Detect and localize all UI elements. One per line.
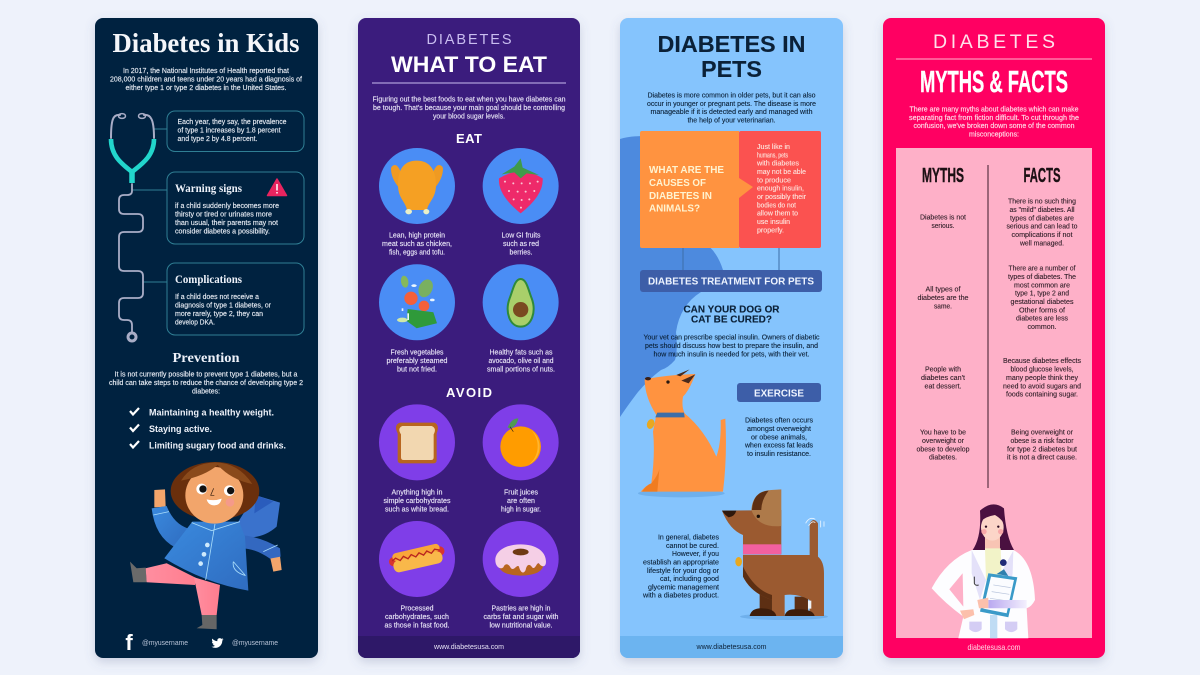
callout: prevalence xyxy=(167,111,304,152)
caption: processed carbohydrates: carbohydrates, such xyxy=(385,614,449,621)
fact 1: types of diabetes are xyxy=(1010,216,1074,222)
callout: warning signs: if a child suddenly becomes more xyxy=(175,203,279,210)
text: exercise: or obese animals, xyxy=(751,434,807,442)
fact 4: for type 2 diabetes but xyxy=(1007,446,1077,454)
heading: EAT: EAT xyxy=(456,131,482,146)
text: cannot be cured: lifestyle for your dog or xyxy=(647,568,720,575)
callout: causes: enough insulin, xyxy=(757,186,804,193)
caption: processed carbohydrates: as those in fast food. xyxy=(384,622,450,630)
caption: low GI fruits: Low GI fruits xyxy=(502,232,541,240)
text: cannot be cured: cannot be cured. xyxy=(666,543,719,550)
panel: myths and facts xyxy=(883,18,1105,658)
fact 3: many people think they xyxy=(1006,375,1078,382)
subheading: can your dog be cured: CAT BE CURED? xyxy=(691,314,772,326)
fact 4: Being overweight or xyxy=(1011,430,1074,436)
caption: pastries: Pastries are high in xyxy=(492,606,551,612)
illustration: doctor xyxy=(932,504,1035,638)
callout: prevalence: and type 2 by 4.8 percent. xyxy=(178,136,258,143)
caption: pastries: carbs fat and sugar with xyxy=(484,614,559,621)
intro text: either type 1 or type 2 diabetes in the United States. xyxy=(126,85,287,92)
fact 2: common. xyxy=(1028,324,1057,331)
caption: healthy fats: avocado, olive oil and xyxy=(488,358,554,365)
callout: complications: If a child does not receive a xyxy=(175,294,259,301)
fact 3: Because diabetes effects xyxy=(1003,358,1081,365)
callout: complications: Complications xyxy=(175,272,242,286)
caption: fresh vegetables: but not fried. xyxy=(397,366,437,374)
social: twitter xyxy=(212,638,278,648)
fact 2: Other forms of xyxy=(1019,308,1065,314)
checklist xyxy=(130,408,286,452)
fact 4 xyxy=(1007,430,1077,462)
myth 4: overweight or xyxy=(922,438,965,445)
title: Diabetes in Pets xyxy=(658,31,806,82)
prevention text: diabetes: xyxy=(192,388,220,396)
caption: pastries: low nutritional value. xyxy=(490,622,553,630)
myth 3: diabetes can't xyxy=(921,375,965,382)
fact 2: type 1, type 2 and xyxy=(1015,290,1069,298)
subheading: can your dog be cured: CAN YOUR DOG OR xyxy=(684,304,780,316)
footer band xyxy=(358,636,580,658)
intro text: manageable if it is detected early and managed with xyxy=(650,109,813,116)
intro text: your blood sugar levels. xyxy=(433,114,505,120)
fact 2: gestational diabetes xyxy=(1010,299,1074,306)
fact 4: obese is a risk factor xyxy=(1010,438,1074,445)
myth 4: diabetes. xyxy=(929,454,957,462)
callout: prevalence: of type 1 increases by 1.8 percent xyxy=(178,128,281,134)
background blob xyxy=(620,136,723,417)
fact 1 xyxy=(1006,198,1078,248)
intro text: the help of your veterinarian. xyxy=(688,118,776,124)
caption: lean protein: meat such as chicken, xyxy=(382,241,452,248)
text: cannot be cured: In general, diabetes xyxy=(658,534,719,542)
illustration: cat xyxy=(638,369,726,497)
intro text: separating fact from fiction difficult. To cut through the xyxy=(909,115,1079,122)
caption: fresh vegetables: preferably steamed xyxy=(386,358,448,365)
caption: low GI fruits: such as red xyxy=(503,241,539,248)
text: cannot be cured: with a diabetes product. xyxy=(642,592,719,600)
intro text: Figuring out the best foods to eat when you have diabetes can xyxy=(372,96,566,104)
text: vet insulin: Your vet can prescribe special insulin. Owners of diabetic xyxy=(644,334,820,342)
food icon: strawberry xyxy=(483,148,559,224)
checklist: Limiting sugary food and drinks. xyxy=(149,440,286,452)
callout: complications: more rarely, type 2, they can xyxy=(175,311,263,318)
myth 2: diabetes are the xyxy=(918,295,969,302)
food icon: orange xyxy=(483,404,559,480)
text: cannot be cured: establish an appropriate xyxy=(643,560,719,566)
fact 2: most common are xyxy=(1014,282,1070,290)
myth 2: same. xyxy=(934,304,952,310)
text: exercise xyxy=(744,418,814,458)
callout: causes: may not be able xyxy=(757,169,806,176)
callout: causes: to produce xyxy=(757,177,791,184)
myth 3 xyxy=(921,366,965,390)
food icon: vegetables xyxy=(379,264,455,340)
caption: fresh vegetables: Fresh vegetables xyxy=(390,350,444,356)
myth 4: You have to be xyxy=(920,430,966,436)
connector lines xyxy=(683,248,779,270)
column heading: myths: MYTHS xyxy=(922,165,964,187)
callout: causes xyxy=(640,131,821,248)
button: exercise: EXERCISE xyxy=(754,388,804,400)
column heading: facts: FACTS xyxy=(1024,165,1060,187)
myth 2: All types of xyxy=(926,286,961,294)
heading bar: treatment xyxy=(640,270,822,292)
callout: causes: properly. xyxy=(757,227,784,234)
caption: fruit juices xyxy=(501,490,541,514)
social: facebook: f xyxy=(125,630,133,655)
callout: causes: with diabetes xyxy=(756,161,800,168)
title: WHAT TO EAT: WHAT TO EAT xyxy=(391,52,547,77)
callout: causes: humans, pets xyxy=(757,152,788,159)
prevention text: child can take steps to reduce the chance of developing type 2 xyxy=(109,380,303,387)
intro text xyxy=(372,96,566,120)
myth 1: Diabetes is not xyxy=(920,214,966,222)
illustration: dancing child xyxy=(130,462,282,629)
callout: complications: develop DKA. xyxy=(175,320,215,326)
text: vet insulin: how much insulin is needed for pets, with their vet. xyxy=(654,352,810,358)
myth 1 xyxy=(920,214,966,230)
fact 3 xyxy=(1003,358,1081,398)
fact 1: serious and can lead to xyxy=(1006,224,1078,230)
caption: lean protein: Lean, high protein xyxy=(389,232,445,240)
callout: causes: CAUSES OF xyxy=(649,177,707,189)
callout: complications: diagnosis of type 1 diabetes, or xyxy=(175,302,272,310)
text: exercise: when excess fat leads xyxy=(744,442,813,450)
callout: warning signs: Warning signs xyxy=(175,181,242,195)
caption: processed carbohydrates xyxy=(384,606,450,630)
caption: fresh vegetables xyxy=(386,350,448,374)
caption: healthy fats: small portions of nuts. xyxy=(487,366,555,374)
footer url: diabetesusa.com xyxy=(968,643,1021,652)
fact 2: diabetes are less xyxy=(1016,316,1068,322)
caption: fruit juices: are often xyxy=(507,498,535,505)
text: vet insulin xyxy=(644,334,820,358)
heading: AVOID: AVOID xyxy=(446,385,492,400)
intro text: occur in younger or pregnant pets. The disease is more xyxy=(647,101,816,108)
caption: lean protein: fish, eggs and tofu. xyxy=(389,250,445,256)
intro text: 208,000 children and teens under 20 years had a diagnosis of xyxy=(110,76,302,84)
intro text: confusion, we've broken down some of the common xyxy=(914,123,1075,130)
title: Diabetes in Pets: PETS xyxy=(701,56,762,82)
fact 1: complications if not xyxy=(1012,232,1073,239)
social: facebook xyxy=(125,630,188,655)
caption: processed carbohydrates: Processed xyxy=(400,606,434,612)
food icon: avocado xyxy=(483,264,559,340)
callout: causes: use insulin xyxy=(757,219,790,226)
text: cannot be cured: glycemic management xyxy=(648,584,719,592)
myth 1: serious. xyxy=(932,223,955,230)
callout: causes: Just like in xyxy=(757,144,790,151)
icon: warning triangle xyxy=(268,179,286,196)
callout: causes: allow them to xyxy=(757,211,798,218)
caption: simple carbohydrates: simple carbohydrates xyxy=(384,498,451,505)
fact 1: well managed. xyxy=(1019,240,1064,248)
panel: what to eat xyxy=(358,18,580,658)
text: cannot be cured xyxy=(642,534,720,600)
food icon: doughnut xyxy=(483,521,559,597)
fact 2: There are a number of xyxy=(1008,266,1076,272)
footer band: www.diabetesusa.com xyxy=(433,642,504,651)
footer band xyxy=(620,636,843,658)
text: exercise: to insulin resistance. xyxy=(747,451,811,458)
fact 3: blood glucose levels, xyxy=(1010,366,1074,374)
prevention text: It is not currently possible to prevent type 1 diabetes, but a xyxy=(114,372,298,378)
heading bar: treatment: DIABETES TREATMENT FOR PETS xyxy=(648,276,814,288)
callout: warning signs xyxy=(167,172,304,244)
intro text xyxy=(909,106,1079,138)
fact 3: foods containing sugar. xyxy=(1006,392,1078,398)
caption: lean protein xyxy=(382,232,452,256)
callout: causes: bodies do not xyxy=(757,202,796,209)
caption: simple carbohydrates: Anything high in xyxy=(392,490,443,496)
callout: causes: ANIMALS? xyxy=(649,202,700,214)
intro text xyxy=(647,92,816,124)
myth 3: People with xyxy=(925,366,961,374)
caption: pastries xyxy=(484,606,559,630)
fact 3: need to avoid sugars and xyxy=(1003,384,1081,390)
caption: low GI fruits: berries. xyxy=(510,250,533,256)
checklist: Staying active. xyxy=(149,424,212,435)
prevention text xyxy=(109,372,303,396)
text: exercise: amongst overweight xyxy=(747,426,811,433)
text: exercise: Diabetes often occurs xyxy=(745,418,814,424)
food icon: bread xyxy=(379,404,455,480)
callout: warning signs: than usual, their parents may not xyxy=(175,220,278,227)
fact 1: as "mild" diabetes. All xyxy=(1010,207,1075,214)
subheading: can your dog be cured xyxy=(684,304,780,326)
caption: simple carbohydrates xyxy=(384,490,451,514)
callout: prevalence: Each year, they say, the prevalence xyxy=(178,119,287,126)
text: cannot be cured: cat, including good xyxy=(660,576,719,583)
table panel xyxy=(896,148,1092,638)
callout: warning signs: consider diabetes a possibility. xyxy=(175,228,270,236)
myth 4: obese to develop xyxy=(916,446,970,454)
callout: warning signs: thirsty or tired or urinates more xyxy=(175,212,272,218)
title: myths and facts: MYTHS & FACTS xyxy=(920,64,1068,99)
intro text: Diabetes is more common in older pets, but it can also xyxy=(648,92,816,100)
panel: diabetes in pets xyxy=(620,18,843,658)
intro text: be tough. That's because your main goal should be controlling xyxy=(373,105,565,112)
intro text xyxy=(110,68,302,92)
intro text: In 2017, the National Institutes of Health reported that xyxy=(123,68,289,75)
food icon: hot dog xyxy=(379,521,455,597)
fact 4: it is not a direct cause. xyxy=(1007,454,1077,462)
title: Diabetes in Kids: Diabetes in Kids xyxy=(112,28,300,58)
text: cannot be cured: However, if you xyxy=(672,551,719,558)
illustration: dog xyxy=(722,489,828,620)
footer band: www.diabetesusa.com xyxy=(696,642,766,651)
callout: causes: DIABETES IN xyxy=(649,190,712,202)
fact 1: There is no such thing xyxy=(1008,198,1076,206)
button: exercise xyxy=(737,383,821,402)
myth 4 xyxy=(916,430,970,462)
callout: causes: or possibly their xyxy=(757,194,807,201)
callout: complications xyxy=(167,263,304,335)
text: vet insulin: pets should discuss how best to prepare the insulin, and xyxy=(645,343,818,350)
intro text: There are many myths about diabetes which can make xyxy=(910,106,1079,114)
intro text: misconceptions: xyxy=(969,132,1019,138)
checklist: Maintaining a healthy weight. xyxy=(149,408,274,418)
fact 2: types of diabetes. The xyxy=(1008,274,1076,281)
caption: fruit juices: Fruit juices xyxy=(504,490,538,496)
kicker: DIABETES: DIABETES xyxy=(933,31,1055,53)
title: Diabetes in Pets: DIABETES IN xyxy=(658,31,806,57)
panel: diabetes in kids xyxy=(95,18,318,658)
myth 2 xyxy=(918,286,969,310)
kicker: DIABETES: DIABETES xyxy=(426,32,512,48)
caption: low GI fruits xyxy=(502,232,541,256)
caption: healthy fats: Healthy fats such as xyxy=(490,350,553,356)
myth 3: eat dessert. xyxy=(924,384,962,390)
caption: simple carbohydrates: such as white bread. xyxy=(385,506,449,514)
fact 2 xyxy=(1008,266,1076,331)
social: twitter: @myusername xyxy=(232,638,278,647)
food icon: chicken xyxy=(379,148,455,224)
caption: healthy fats xyxy=(487,350,555,374)
stethoscope illustration xyxy=(111,114,167,341)
social: facebook: @myusername xyxy=(142,638,188,647)
caption: fruit juices: high in sugar. xyxy=(501,506,541,514)
callout: causes: WHAT ARE THE xyxy=(649,164,724,176)
heading: prevention: Prevention xyxy=(172,351,240,366)
